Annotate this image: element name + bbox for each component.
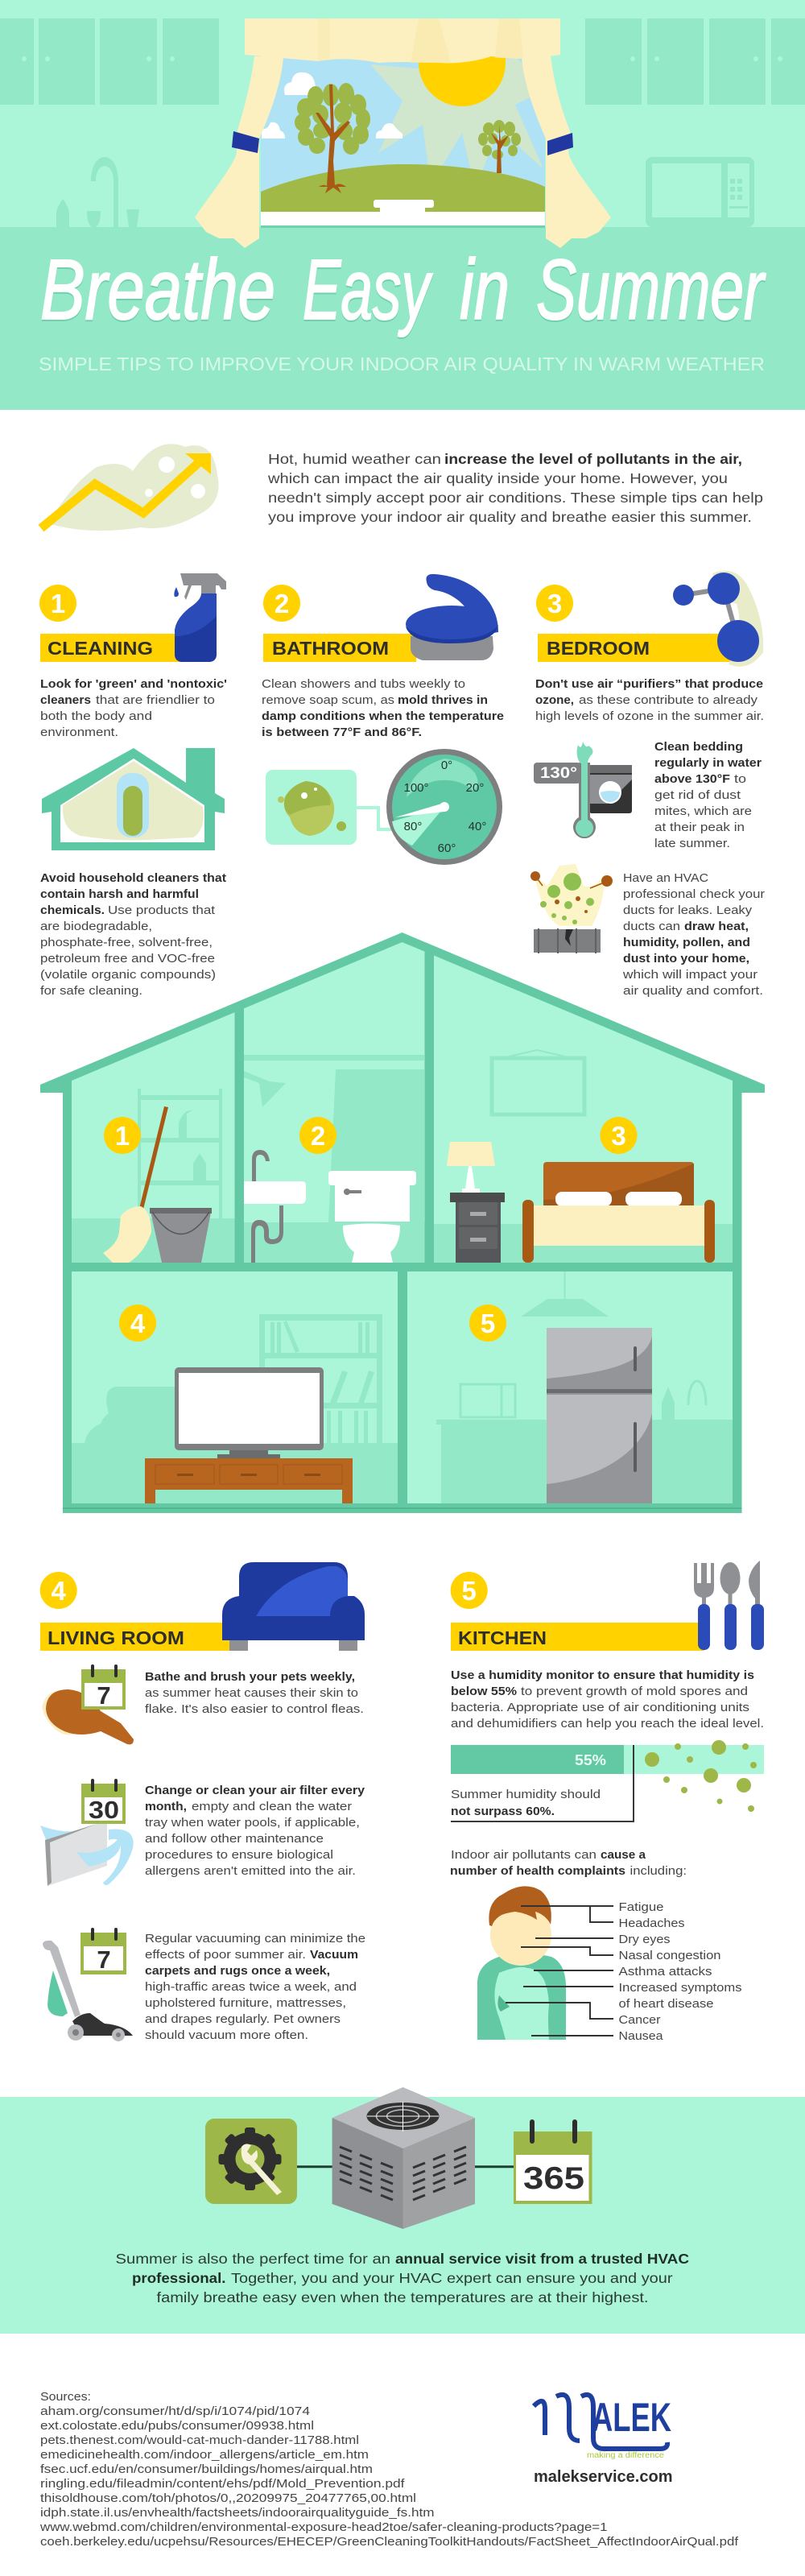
text: humidity monitor: to prevent growth of mold spores and <box>521 1685 748 1698</box>
chart: temperature gauge: 80° <box>404 820 422 833</box>
text: health complaints intro: including: <box>630 1864 687 1878</box>
badge: number 1 <box>39 585 76 622</box>
icon: calendar 7 days vacuum <box>80 1928 126 1974</box>
text: vacuuming: high-traffic areas twice a week, and <box>145 1980 357 1994</box>
icon: hot water thermometer and washer: 130° <box>540 765 577 782</box>
heading: living room <box>40 1623 233 1651</box>
icon: hvac condenser unit <box>332 2087 475 2229</box>
icon: sun <box>370 56 547 189</box>
icon: ozone molecule <box>673 571 763 667</box>
heading: bathroom: BATHROOM <box>272 638 389 659</box>
panel: bathroom <box>262 574 504 865</box>
text: avoid chemicals: contain harsh and harmful <box>40 887 199 901</box>
icon: clouds <box>262 72 402 139</box>
room 1: utility closet <box>103 1089 222 1263</box>
badge: room 3: 3 <box>611 1121 626 1151</box>
badge: number 2 <box>263 585 300 622</box>
logo: Malek: making a difference <box>587 2451 664 2460</box>
badge: room 2: 2 <box>311 1121 325 1151</box>
logo: Malek <box>534 2395 673 2486</box>
text: green cleaners: that are friendlier to <box>96 693 215 707</box>
badge: room 4: 4 <box>130 1309 146 1338</box>
icon: left kitchen cabinets <box>0 19 219 105</box>
labels: symptoms: Headaches <box>618 1916 684 1930</box>
text: pets <box>145 1670 364 1716</box>
text: avoid chemicals: chemicals. <box>40 903 105 917</box>
text: air filter: tray when water pools, if applicable, <box>145 1816 360 1830</box>
icon: lamp <box>447 1142 495 1193</box>
text: hvac duct leaks: dust into your home, <box>623 952 749 965</box>
icon: calendar 30 days: 30 <box>89 1796 119 1824</box>
icon: window scene <box>195 19 611 248</box>
labels: symptoms: Cancer <box>618 2013 660 2027</box>
badge: number 2: 2 <box>275 589 289 618</box>
icon: connector line <box>357 808 396 829</box>
badge: number 5: 5 <box>462 1576 477 1606</box>
icon: nightstand <box>450 1193 505 1263</box>
text: hvac duct leaks: professional check your <box>623 887 765 901</box>
text: vacuuming: and drapes regularly. Pet owners <box>145 2012 341 2026</box>
icon: mold sample <box>266 770 357 845</box>
badge: number 3 <box>536 585 573 622</box>
text: sources: idph.state.il.us/envhealth/factsheets/indoorairqualityguide_fs.htm <box>40 2506 435 2520</box>
text: introduction: Hot, humid weather can <box>268 451 441 467</box>
heading: kitchen <box>451 1623 704 1651</box>
text: air filter: empty and clean the water <box>192 1800 352 1813</box>
badge: room 5: 5 <box>481 1309 495 1338</box>
text: vacuuming: should vacuum more often. <box>145 2028 308 2042</box>
icon: television <box>175 1367 324 1458</box>
icon: house with test tube <box>42 748 225 850</box>
chart: temperature gauge: 60° <box>438 841 456 855</box>
text: avoid chemicals: Use products that <box>108 903 216 917</box>
icon: condenser vents <box>340 2147 466 2200</box>
text: health complaints intro: Indoor air pollutants can <box>451 1848 597 1862</box>
icon: scrub brush <box>406 574 498 660</box>
text: mold in bathrooms: mold thrives in <box>398 693 488 707</box>
text: air filter <box>145 1784 365 1878</box>
icon: vacuum with calendar <box>43 1928 133 2041</box>
room 2: bathroom <box>244 1055 424 1263</box>
icon: faint picture frame <box>492 1050 584 1114</box>
text: health complaints intro: cause a <box>601 1848 646 1862</box>
panel: cleaning <box>39 573 227 998</box>
text: clean bedding: at their peak in <box>654 821 745 834</box>
text: introduction: increase the level of pollutants in the air, <box>444 451 742 467</box>
icon: valance <box>245 19 560 63</box>
icon: rising pollution arrow <box>41 444 219 531</box>
chart: temperature gauge: 100° <box>403 781 429 795</box>
text: clean bedding: regularly in water <box>654 756 762 770</box>
text: vacuuming: upholstered furniture, mattresses, <box>145 1996 346 2010</box>
icon: large tree <box>295 83 370 193</box>
text: hvac duct leaks: which will impact your <box>622 968 758 982</box>
text: avoid chemicals: for safe cleaning. <box>40 984 142 998</box>
room 5: kitchen <box>436 1271 733 1503</box>
icon: gear and wrench <box>205 2119 297 2204</box>
text: clean bedding: mites, which are <box>654 804 752 818</box>
room 3: bedroom <box>447 1050 715 1263</box>
text: green cleaners: environment. <box>40 726 118 739</box>
text: annual service visit <box>116 2251 689 2305</box>
icon: spray bottle <box>174 573 226 662</box>
icon: media console <box>145 1458 353 1503</box>
text: avoid chemicals: petroleum free and VOC-free <box>40 952 215 965</box>
text: green cleaners: cleaners <box>40 693 91 707</box>
heading: living room: LIVING ROOM <box>47 1627 184 1648</box>
text: annual service visit: professional. <box>132 2270 225 2286</box>
text: ozone: Don't use air “purifiers” that produce <box>535 677 763 691</box>
text: vacuuming: carpets and rugs once a week, <box>145 1964 330 1978</box>
badge: room 1 <box>104 1117 141 1154</box>
text: mold in bathrooms: Clean showers and tubs weekly to <box>262 677 465 691</box>
text: ozone: high levels of ozone in the summer air. <box>535 709 764 723</box>
text: clean bedding: late summer. <box>654 837 730 850</box>
text: health complaints intro: number of health complaints <box>450 1864 625 1878</box>
text: sources: ringling.edu/fileadmin/content/ehs/pdf/Mold_Prevention.pdf <box>40 2477 405 2491</box>
title: in <box>460 242 510 337</box>
icon: bed <box>522 1162 715 1263</box>
text: clean bedding: to <box>734 772 746 786</box>
text: hvac duct leaks: humidity, pollen, and <box>623 936 750 949</box>
icon: right curtain <box>522 56 611 248</box>
text: pets: Bathe and brush your pets weekly, <box>145 1670 355 1684</box>
badge: number 3: 3 <box>547 589 562 618</box>
icon: sink <box>244 1150 306 1263</box>
text: sources: fsec.ucf.edu/en/consumer/buildings/homes/airqual.htm <box>40 2462 373 2476</box>
text: summer humidity: Summer humidity should <box>451 1788 601 1801</box>
labels: symptoms: Nasal congestion <box>618 1949 721 1962</box>
labels: symptoms: Asthma attacks <box>618 1965 712 1979</box>
icon: left curtain <box>195 56 283 248</box>
text: clean bedding: above 130°F <box>654 772 730 786</box>
icon: microwave silhouette <box>646 157 754 227</box>
text: humidity monitor: bacteria. Appropriate use of air conditioning units <box>451 1701 749 1714</box>
text: health complaints intro <box>450 1848 687 1878</box>
title <box>40 242 766 337</box>
text: humidity monitor: Use a humidity monitor to ensure that humidity is <box>451 1668 754 1682</box>
text: ozone: as these contribute to already <box>579 693 758 707</box>
text: annual service visit: family breathe easy even when the temperatures are at their highest. <box>156 2289 649 2305</box>
panel: bedroom <box>530 571 765 998</box>
chart: humidity bar <box>451 1740 764 1821</box>
icon: right kitchen cabinets <box>585 19 805 105</box>
text: summer humidity: not surpass 60%. <box>451 1805 555 1818</box>
text: hvac duct leaks: Have an HVAC <box>623 871 708 885</box>
chart: humidity bar: 55% <box>575 1752 606 1768</box>
text: green cleaners: both the body and <box>40 709 152 723</box>
text: air filter: month, <box>145 1800 187 1813</box>
badge: room 1: 1 <box>115 1121 130 1151</box>
badge: room 3 <box>601 1117 638 1154</box>
icon: pet brush with calendar <box>42 1664 134 1744</box>
text: vacuuming: effects of poor summer air. <box>145 1948 306 1962</box>
text: summer humidity <box>451 1788 601 1818</box>
icon: faint shower rod and head <box>244 1055 424 1107</box>
text: clean bedding <box>654 740 762 850</box>
icon: faint couch <box>85 1387 177 1443</box>
labels: symptoms: Increased symptoms <box>618 1981 742 1995</box>
text: ozone: ozone, <box>535 693 574 707</box>
icon: faint counters <box>436 1381 733 1503</box>
heading: cleaning <box>40 634 185 662</box>
icon: person <box>477 1886 566 2040</box>
text: sources: ext.colostate.edu/pubs/consumer/09938.html <box>40 2419 314 2433</box>
leader lines <box>506 1906 613 2036</box>
text: vacuuming: Regular vacuuming can minimize the <box>145 1932 365 1945</box>
title: Easy <box>303 242 433 337</box>
labels: symptoms <box>618 1900 742 2043</box>
heading: bedroom <box>538 634 735 662</box>
icon: bucket <box>150 1208 212 1263</box>
text: introduction: needn't simply accept poor air conditions. These simple tips can help <box>268 490 763 506</box>
badge: room 2 <box>299 1117 336 1154</box>
chart: temperature gauge: 0° <box>441 759 452 772</box>
icon: leaky duct with allergens <box>530 864 613 953</box>
text: introduction: you improve your indoor air quality and breathe easier this summer. <box>268 509 752 525</box>
badge: room 4 <box>119 1305 156 1342</box>
subtitle: SIMPLE TIPS TO IMPROVE YOUR INDOOR AIR QUALITY IN WARM WEATHER <box>39 354 765 374</box>
text: green cleaners: Look for 'green' and 'nontoxic' <box>40 677 227 691</box>
labels: symptoms: Nausea <box>618 2029 663 2043</box>
text: pets: as summer heat causes their skin to <box>145 1686 358 1700</box>
text: air filter: Change or clean your air filter every <box>145 1784 365 1797</box>
icon: calendar 7 days vacuum: 7 <box>97 1945 111 1974</box>
text: avoid chemicals <box>40 871 226 998</box>
icon: mold spores <box>645 1740 757 1812</box>
text: air filter: and follow other maintenance <box>145 1832 324 1846</box>
room 4: living room <box>72 1305 398 1503</box>
text: introduction <box>267 451 763 525</box>
text: sources <box>39 2390 739 2549</box>
illustration: house cross-section <box>40 932 765 1513</box>
logo: Malek: malekservice.com <box>534 2468 673 2486</box>
text: hvac duct leaks: air quality and comfort. <box>623 984 763 998</box>
panel: header <box>0 0 805 410</box>
text: introduction: which can impact the air quality inside your home. However, you <box>267 470 728 486</box>
text: sources: aham.org/consumer/ht/d/sp/i/1074/pid/1074 <box>40 2404 310 2418</box>
text: hvac duct leaks: draw heat, <box>684 920 749 933</box>
text: sources: coeh.berkeley.edu/ucpehsu/Resources/EHECEP/GreenCleaningToolkitHandouts/FactSheet_AffectIndoorAirQual.pdf <box>40 2535 739 2549</box>
heading: kitchen: KITCHEN <box>458 1627 547 1648</box>
text: mold in bathrooms <box>262 677 504 739</box>
text: avoid chemicals: Avoid household cleaners that <box>40 871 226 885</box>
icon: shower curtain <box>328 1069 424 1222</box>
text: annual service visit: Summer is also the perfect time for an <box>116 2251 390 2267</box>
heading: bedroom: BEDROOM <box>547 638 650 659</box>
icon: faint microwave <box>460 1384 515 1417</box>
text: avoid chemicals: (volatile organic compounds) <box>40 968 216 982</box>
heading: cleaning: CLEANING <box>47 638 153 659</box>
icon: window sill <box>261 200 545 225</box>
text: air filter: procedures to ensure biological <box>145 1848 333 1862</box>
badge: number 4: 4 <box>52 1576 67 1606</box>
text: sources: Sources: <box>40 2390 91 2404</box>
heading: bathroom <box>263 634 416 662</box>
text: avoid chemicals: are biodegradable, <box>40 920 152 933</box>
icon: hot water thermometer and washer <box>534 742 632 838</box>
icon: calendar 7 days: 7 <box>97 1681 111 1710</box>
badge: number 4 <box>40 1572 77 1609</box>
badge: number 5 <box>451 1572 488 1609</box>
text: clean bedding: get rid of dust <box>654 788 741 802</box>
text: mold in bathrooms: is between 77°F and 86°F. <box>262 726 422 739</box>
text: mold in bathrooms: remove soap scum, as <box>262 693 394 707</box>
text: annual service visit: annual service visit from a trusted HVAC <box>395 2251 689 2267</box>
text: green cleaners <box>40 677 227 739</box>
title: Breathe <box>40 242 275 337</box>
connector lines <box>297 2165 514 2168</box>
text: pets: flake. It's also easier to control fleas. <box>145 1702 364 1716</box>
labels: symptoms: Fatigue <box>618 1900 663 1914</box>
panel: living room <box>40 1562 365 2042</box>
icon: small tree <box>478 120 521 173</box>
text: mold in bathrooms: damp conditions when the temperature <box>262 709 504 723</box>
text: humidity monitor <box>451 1668 764 1730</box>
icon: air filter with calendar <box>40 1779 134 1886</box>
logo: Malek: ALEK <box>592 2395 671 2440</box>
text: air filter: allergens aren't emitted into the air. <box>145 1864 356 1878</box>
text: vacuuming: Vacuum <box>310 1948 358 1962</box>
panel: annual service <box>0 2087 805 2334</box>
text: humidity monitor: below 55% <box>451 1685 517 1698</box>
icon: cutlery <box>694 1561 764 1650</box>
text: hvac duct leaks: ducts can <box>623 920 680 933</box>
labels: symptoms: of heart disease <box>618 1997 713 2011</box>
text: vacuuming <box>145 1932 365 2042</box>
text: hvac duct leaks <box>622 871 765 998</box>
text: annual service visit: Together, you and your HVAC expert can ensure you and your <box>231 2270 673 2286</box>
text: hvac duct leaks: ducts for leaks. Leaky <box>623 903 753 917</box>
icon: faint shelves <box>138 1089 222 1222</box>
icon: calendar 365 days <box>514 2119 592 2204</box>
text: sources: www.webmd.com/children/environmental-exposure-head2toe/safer-cleaning-products?page=1 <box>39 2520 607 2534</box>
text: sources: thisoldhouse.com/toh/photos/0,,20209975_20477765,00.html <box>40 2491 416 2505</box>
badge: number 1: 1 <box>51 589 65 618</box>
text: sources: emedicinehealth.com/indoor_allergens/article_em.htm <box>40 2448 369 2462</box>
text: humidity monitor: and dehumidifiers can help you reach the ideal level. <box>451 1717 764 1730</box>
icon: calendar 365 days: 365 <box>523 2161 584 2196</box>
text: avoid chemicals: phosphate-free, solvent-free, <box>40 936 213 949</box>
diagram: person with health effects <box>477 1886 742 2043</box>
badge: room 5 <box>469 1305 506 1342</box>
chart: temperature gauge: 40° <box>469 820 486 833</box>
icon: mop <box>103 1106 168 1263</box>
text: ozone <box>535 677 764 723</box>
icon: pendant lamp <box>521 1271 609 1317</box>
labels: symptoms: Dry eyes <box>618 1933 670 1946</box>
icon: couch <box>222 1562 365 1651</box>
icon: hill <box>261 164 545 212</box>
chart: temperature gauge <box>386 749 502 865</box>
icon: refrigerator <box>547 1328 652 1503</box>
icon: sink silhouette <box>56 157 139 227</box>
icon: faint bookshelf <box>259 1314 382 1443</box>
icon: toilet <box>328 1171 416 1263</box>
chart: temperature gauge: 20° <box>466 781 484 795</box>
text: sources: pets.thenest.com/would-cat-much-dander-11788.html <box>40 2433 359 2447</box>
panel: kitchen <box>450 1561 764 2043</box>
text: clean bedding: Clean bedding <box>654 740 743 754</box>
